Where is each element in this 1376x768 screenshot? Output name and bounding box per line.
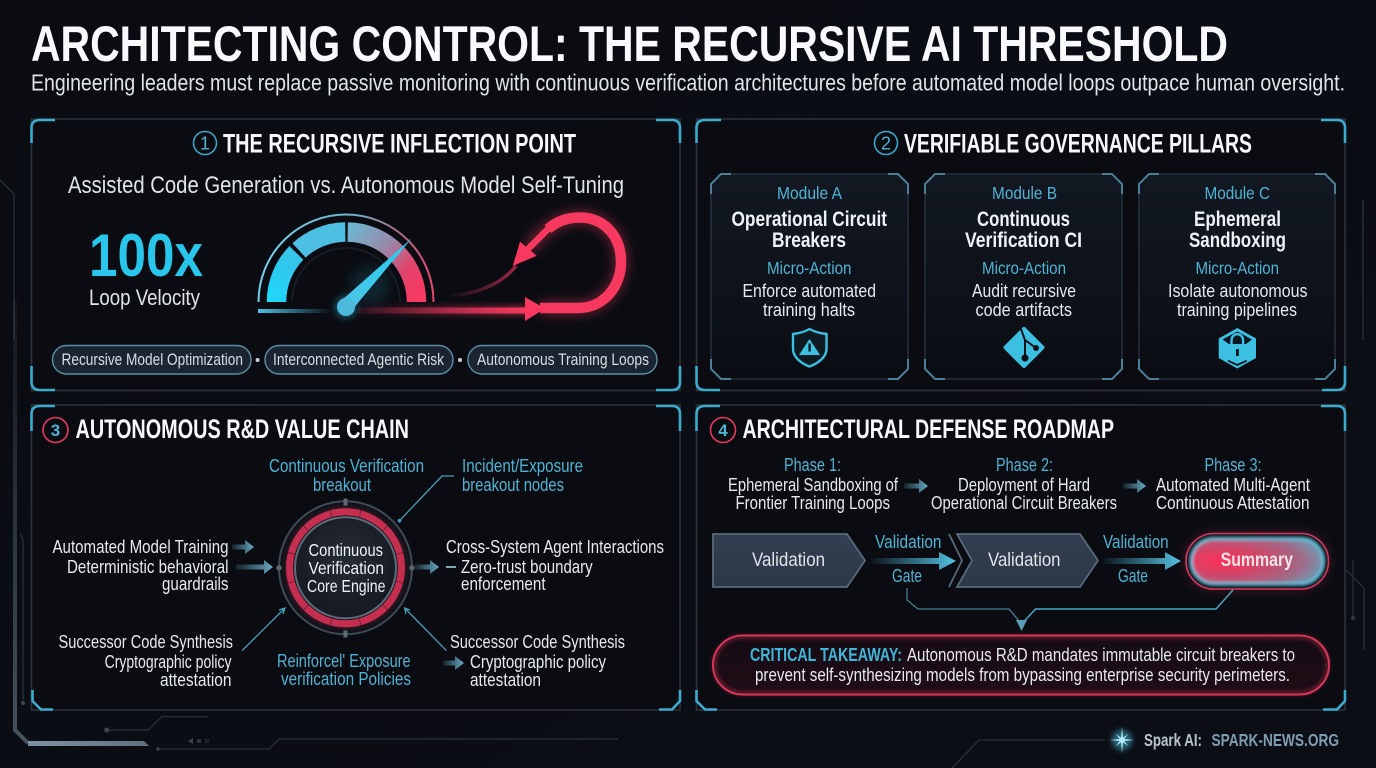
critical takeaway: prevent self-synthesizing models from bypassing enterprise security perimeters. [755,665,1290,685]
bottom-left input: successor code synthesis: attestation [160,669,232,690]
phase 2: Phase 2: [996,455,1053,475]
validation gate 2: Gate [1118,565,1148,586]
bottom-right input: successor code synthesis: Cryptographic policy [470,651,607,672]
right output: cross-system agent interactions: Zero-trust boundary [461,556,593,577]
heading 1 [194,128,576,158]
card: module C: Sandboxing [1189,229,1286,252]
stat: 100x loop velocity: Loop Velocity [89,285,200,310]
pill: recursive model optimization [52,346,251,374]
chevron: validation 2 [949,534,1098,587]
core engine circle: Continuous [308,540,383,560]
validation gate 1: Validation [875,531,942,552]
chevron: validation 2: Validation [988,549,1060,571]
arrow: training to core 1 [232,540,254,554]
card: module C: Micro-Action [1196,258,1279,278]
label: continuous verification breakout: Continuous Verification [269,456,424,476]
pill: autonomous training loops: Autonomous Training Loops [477,350,649,369]
card: module A: Enforce automated [742,280,876,301]
bottom-left input: successor code synthesis [58,631,233,690]
label: reinforced exposure verification policies: verification Policies [281,669,411,689]
arrow: phase 2 to 3 [1123,479,1146,493]
heading 1: 1 [200,134,210,154]
label: incident/exposure breakout nodes [462,456,583,495]
label: continuous verification breakout [269,456,424,495]
phase 2: Operational Circuit Breakers [931,492,1117,513]
heading 4: ARCHITECTURAL DEFENSE ROADMAP [742,414,1114,444]
heading 2 [874,128,1252,158]
left input: automated model training [52,536,228,594]
card: module B: code artifacts [976,299,1072,320]
card: module A: Micro-Action [767,258,852,278]
label: reinforced exposure verification policies: Reinforcel' Exposure [277,651,411,671]
recursive loop arrow [358,218,621,321]
icon: git diamond [1006,329,1042,366]
panel 4: architectural defense roadmap [696,405,1345,710]
core engine circle: Core Engine [307,576,386,596]
left input: automated model training: Deterministic behavioral [67,556,228,577]
footer brand [1110,727,1339,753]
right output: cross-system agent interactions: enforcement [461,573,546,594]
heading 3: 3 [51,421,60,440]
card: module B: Audit recursive [972,280,1076,301]
right output: cross-system agent interactions [446,536,664,594]
phase 3 [1156,455,1310,513]
card: module C [1139,174,1335,379]
left input: automated model training: Automated Model Training [52,536,228,557]
label: continuous verification breakout: breakout [313,475,371,495]
phase 1: Phase 1: [784,455,841,475]
phase 2: Deployment of Hard [958,474,1090,495]
arrow: training to core 2 [236,560,273,574]
critical takeaway: Autonomous R&D mandates immutable circuit breakers to [907,645,1295,665]
pill: interconnected agentic risk: Interconnected Agentic Risk [273,350,444,369]
stat: 100x loop velocity [89,222,203,310]
card: module A: Operational Circuit [732,208,887,231]
arrow: core to agent interactions [415,560,439,574]
footer brand: SPARK-NEWS.ORG [1212,730,1339,750]
heading 2: 2 [881,134,891,154]
card: module A [711,174,908,379]
card: module C: Module C [1204,183,1270,203]
heading 1: THE RECURSIVE INFLECTION POINT [223,128,576,158]
card: module B [925,174,1122,379]
phase 3: Phase 3: [1204,455,1262,475]
icon: warning shield [793,329,826,366]
validation gate 1 [872,531,956,586]
phase 1: Ephemeral Sandboxing of [728,474,899,495]
left input: automated model training: guardrails [162,573,228,594]
heading 2: VERIFIABLE GOVERNANCE PILLARS [904,128,1252,158]
leader line to incident label [398,476,454,522]
panel 1: the recursive inflection point [32,119,680,390]
core engine circle [276,498,415,638]
bottom-right input: successor code synthesis: Successor Code Synthesis [450,631,625,652]
pill: recursive model optimization: Recursive Model Optimization [62,350,243,369]
card: module A: Module A [777,183,842,203]
arrow: phase 1 to 2 [904,479,928,493]
card: module C: training pipelines [1177,299,1297,320]
card: module B: Verification CI [965,229,1082,252]
pill: interconnected agentic risk [265,346,453,374]
phase 1 [728,455,899,513]
critical takeaway: CRITICAL TAKEAWAY: [750,645,902,665]
stat: 100x loop velocity: 100x [89,222,203,289]
bottom-left input: successor code synthesis: Cryptographic policy [105,651,232,672]
right output: cross-system agent interactions: Cross-System Agent Interactions [446,536,664,557]
validation gate 2 [1103,531,1181,586]
heading 4: 4 [718,421,728,440]
phase 3: Continuous Attestation [1156,492,1310,513]
card: module A: training halts [763,299,855,320]
gauge [258,214,434,319]
label: incident/exposure breakout nodes: breakout nodes [462,475,564,495]
phase 3: Automated Multi-Agent [1156,474,1310,495]
bottom-left input: successor code synthesis: Successor Code Synthesis [58,631,233,652]
summary pill: Summary [1221,549,1293,571]
leader arrow bottom-right [405,608,446,651]
card: module B: Micro-Action [982,258,1066,278]
label: incident/exposure breakout nodes: Incident/Exposure [462,456,583,476]
phase 1: Frontier Training Loops [736,492,890,513]
leader arrow bottom-left [242,608,285,651]
comparison subheading: Assisted Code Generation vs. Autonomous Model Self-Tuning [68,172,624,199]
label: reinforced exposure verification policies [277,651,411,689]
chevron: validation 1: Validation [752,549,825,571]
icon: spark star [1110,727,1134,753]
footer brand: Spark AI: [1144,730,1202,750]
heading 4 [710,414,1114,444]
heading 3 [43,414,409,444]
chevron: validation 1 [713,534,865,587]
pill: autonomous training loops [468,346,657,374]
critical takeaway [713,636,1329,694]
panel 3: autonomous R&D value chain [32,405,680,710]
card: module C: Isolate autonomous [1168,280,1308,301]
phase 2 [931,455,1117,513]
core engine circle: Verification [308,558,384,578]
bottom-right input: successor code synthesis: attestation [470,669,541,690]
heading 3: AUTONOMOUS R&D VALUE CHAIN [76,414,409,444]
card: module A: Breakers [772,229,846,252]
panel 2: verifiable governance pillars [696,119,1345,390]
card: module C: Ephemeral [1194,208,1281,231]
validation gate 2: Validation [1103,531,1169,552]
card: module B: Module B [992,183,1057,203]
arrow: to cryptographic policy [443,656,464,670]
validation gate 1: Gate [892,565,922,586]
card: module B: Continuous [977,208,1070,231]
icon: padlock hexagon [1219,328,1256,368]
connector to takeaway [907,588,1233,631]
bottom-right input: successor code synthesis [450,631,625,690]
summary pill [1186,534,1328,589]
